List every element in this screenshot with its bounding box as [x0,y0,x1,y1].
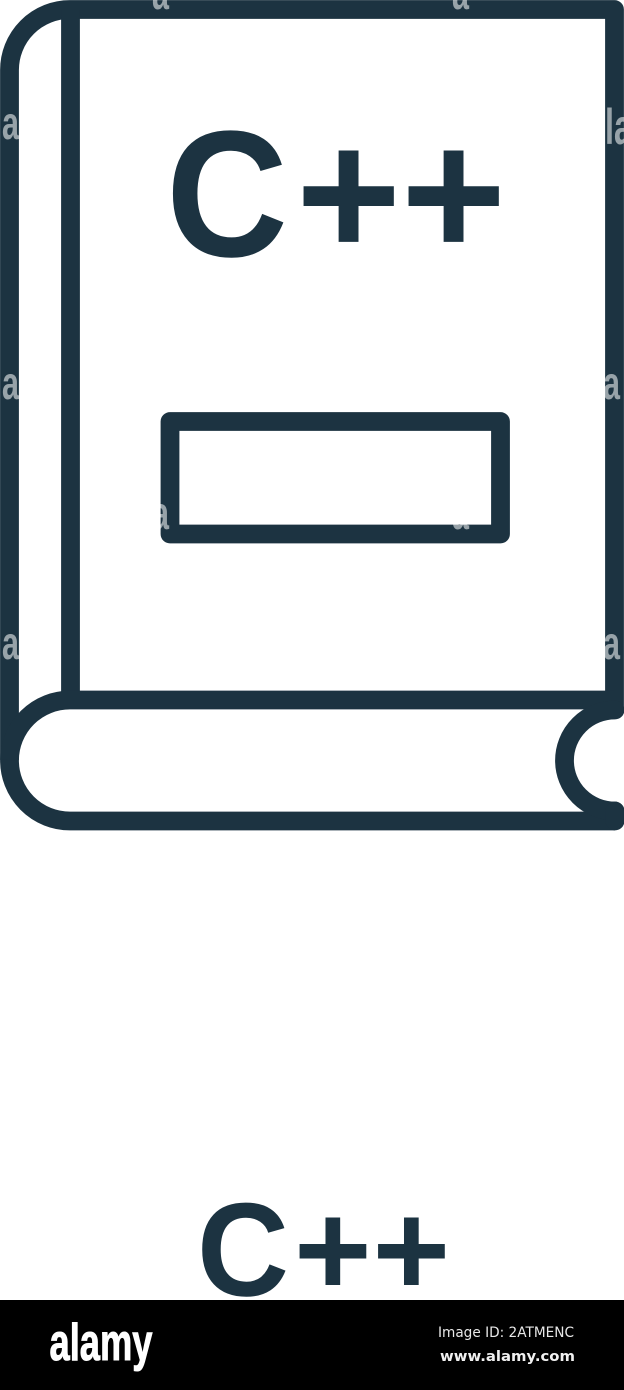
book spine line [61,10,80,700]
cover label rectangle [170,422,500,534]
cover title: C [166,94,288,295]
watermark letters: a [2,357,19,409]
caption: C++: ++ [294,1176,450,1324]
icon: C++ book [9,10,615,821]
image id: Image ID: 2ATMENC [438,1325,574,1341]
watermark letters: a [2,617,19,669]
watermark letters: a [452,487,469,539]
website: www.alamy.com [440,1349,575,1365]
footer background [0,1300,624,1390]
page block notch [564,710,615,811]
watermark letters [2,0,624,669]
book bottom end cap [606,811,624,821]
alamy logo: alamy [50,1314,153,1372]
watermark letters: a [152,487,169,539]
caption: C++: C [197,1176,289,1324]
footer bar [0,1300,624,1390]
watermark letters: a [2,97,19,149]
page block top edge [10,700,614,760]
book cover outline [9,10,615,821]
cover title: ++ [296,94,506,295]
